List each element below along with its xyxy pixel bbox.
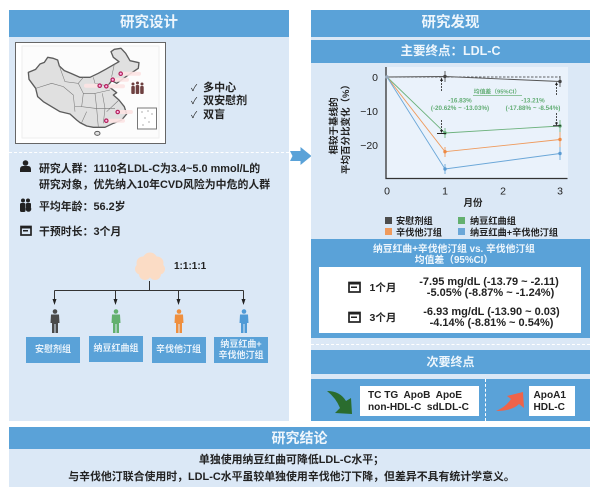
- text: mean age: 平均年龄：56.2岁: [39, 201, 126, 213]
- values: 3 months: -4.14% (-8.81% ~ 0.54%): [430, 317, 553, 329]
- line chart: LDL-C change: 安慰剂组: [396, 215, 433, 226]
- heading: primary endpoint: [311, 40, 590, 63]
- box: decreased markers: non-HDL-C sdLDL-C: [368, 402, 469, 412]
- icon: people: [20, 160, 31, 172]
- group box: placebo: 安慰剂组: [35, 344, 71, 354]
- text: conclusions: 单独使用纳豆红曲可降低LDL-C水平；: [199, 454, 384, 466]
- icon: age: [20, 198, 32, 212]
- values: 1 month: [419, 276, 559, 299]
- line chart: LDL-C change: [328, 67, 568, 238]
- group box: ezetimibe: 辛伐他汀组: [156, 344, 201, 354]
- icon: participant cloud: [135, 252, 165, 280]
- values: 3 months: -6.93 mg/dL (-13.90 ~ 0.03): [423, 306, 560, 318]
- heading: comparison: 纳豆红曲+辛伐他汀组 vs. 辛伐他汀组: [373, 244, 535, 254]
- line chart: LDL-C change: 纳豆红曲组: [470, 215, 516, 226]
- label: 3 months: 3个月: [370, 312, 396, 324]
- heading: study design: [9, 10, 289, 37]
- box: decreased markers: TC TG ApoB ApoE: [368, 390, 462, 401]
- group box: ezetimibe: [152, 337, 206, 362]
- group box: red yeast rice: [89, 336, 143, 362]
- line chart: LDL-C change: 0: [384, 186, 390, 198]
- values: 3 months: [423, 306, 560, 329]
- arrow: design to findings: [290, 147, 311, 165]
- line chart: LDL-C change: 相较于基线的: [328, 97, 340, 155]
- group box: combination: [214, 337, 268, 362]
- heading: conclusions: [9, 427, 590, 449]
- box: decreased markers: [360, 386, 479, 416]
- text: intervention duration: 干预时长：3个月: [39, 226, 121, 238]
- box: increased markers: ApoA1: [534, 390, 566, 401]
- checklist: design features: [191, 82, 247, 121]
- icon: up arrow: [496, 392, 524, 411]
- line chart: LDL-C change: 1: [442, 186, 448, 198]
- line chart: LDL-C change: 辛伐他汀组: [396, 226, 442, 238]
- divider: [9, 152, 289, 153]
- heading: comparison: [373, 244, 535, 266]
- table: differences by month: [318, 267, 580, 333]
- panel: conclusions: [9, 427, 590, 487]
- heading: study design: 研究设计: [120, 15, 178, 31]
- checklist: design features: ✓ 双安慰剂: [191, 95, 247, 107]
- group box: combination: 辛伐他汀组: [218, 350, 264, 360]
- box: increased markers: HDL-C: [534, 402, 565, 412]
- icon: down arrow: [327, 391, 352, 414]
- icon: combination person: [240, 309, 248, 333]
- text: conclusions: [68, 454, 515, 483]
- line chart: LDL-C change: 月份: [463, 197, 483, 209]
- box: increased markers: [528, 386, 574, 416]
- map of China with study sites: [15, 42, 166, 144]
- heading: secondary endpoints: 次要终点: [426, 355, 474, 369]
- values: 1 month: -7.95 mg/dL (-13.79 ~ -2.11): [419, 276, 559, 288]
- icon: calendar 1 month: [348, 282, 361, 293]
- heading: comparison: 均值差（95%CI）: [415, 255, 493, 266]
- icon: placebo person: [50, 309, 60, 333]
- heading: findings: [311, 10, 590, 37]
- divider line: [485, 379, 486, 420]
- randomization tree arrows: [52, 281, 246, 305]
- line chart: LDL-C change: 0: [372, 72, 378, 84]
- line chart: LDL-C change: 均值差（95%CI）: [474, 88, 520, 96]
- heading: findings: 研究发现: [422, 15, 480, 31]
- icon: calendar: [20, 226, 32, 236]
- line chart: LDL-C change: −10: [360, 106, 378, 118]
- text: conclusions: 与辛伐他汀联合使用时，LDL-C水平虽较单独使用辛伐他汀下降，但差异不具有统计学意义。: [68, 471, 515, 483]
- text: study population: 研究对象，优先纳入10年CVD风险为中危的人群: [39, 179, 270, 191]
- divider: [311, 344, 590, 345]
- line chart: LDL-C change: -16.83%: [448, 98, 472, 104]
- heading: conclusions: 研究结论: [272, 430, 328, 446]
- line chart: LDL-C change: 2: [500, 186, 506, 198]
- values: 1 month: -5.05% (-8.87% ~ -1.24%): [427, 287, 554, 299]
- line chart: LDL-C change: -13.21%: [521, 98, 545, 104]
- line chart: LDL-C change: (-17.88% ~ -8.54%): [506, 105, 560, 112]
- label: 1 month: 1个月: [370, 282, 396, 294]
- line chart: LDL-C change: 平均百分比变化（%）: [340, 80, 352, 174]
- text: study population: [39, 162, 270, 191]
- line chart: LDL-C change: −20: [360, 140, 378, 152]
- panel: findings: [311, 10, 590, 421]
- group box: red yeast rice: 纳豆红曲组: [93, 343, 138, 353]
- text: randomization ratio: 1:1:1:1: [174, 261, 206, 272]
- icon: red yeast rice person: [112, 309, 120, 333]
- heading: primary endpoint: 主要终点：LDL-C: [400, 44, 500, 58]
- line chart: LDL-C change: 纳豆红曲+辛伐他汀组: [470, 226, 558, 238]
- text: study population: 研究人群：1110名LDL-C为3.4~5.0 mmol/L的: [39, 163, 260, 175]
- panel: secondary endpoints: [311, 379, 590, 420]
- checklist: design features: ✓ 双盲: [191, 109, 225, 121]
- group box: combination: 纳豆红曲+: [220, 339, 262, 349]
- checklist: design features: ✓ 多中心: [191, 82, 236, 94]
- panel: study design: [9, 10, 289, 421]
- icon: calendar 3 months: [348, 312, 361, 323]
- line chart: LDL-C change: (-20.62% ~ -13.03%): [431, 105, 489, 112]
- heading: secondary endpoints: [311, 350, 590, 374]
- panel: between-group difference: [311, 239, 590, 338]
- line chart: LDL-C change: 3: [557, 186, 563, 198]
- icon: ezetimibe person: [174, 309, 184, 333]
- group box: placebo: [26, 337, 80, 362]
